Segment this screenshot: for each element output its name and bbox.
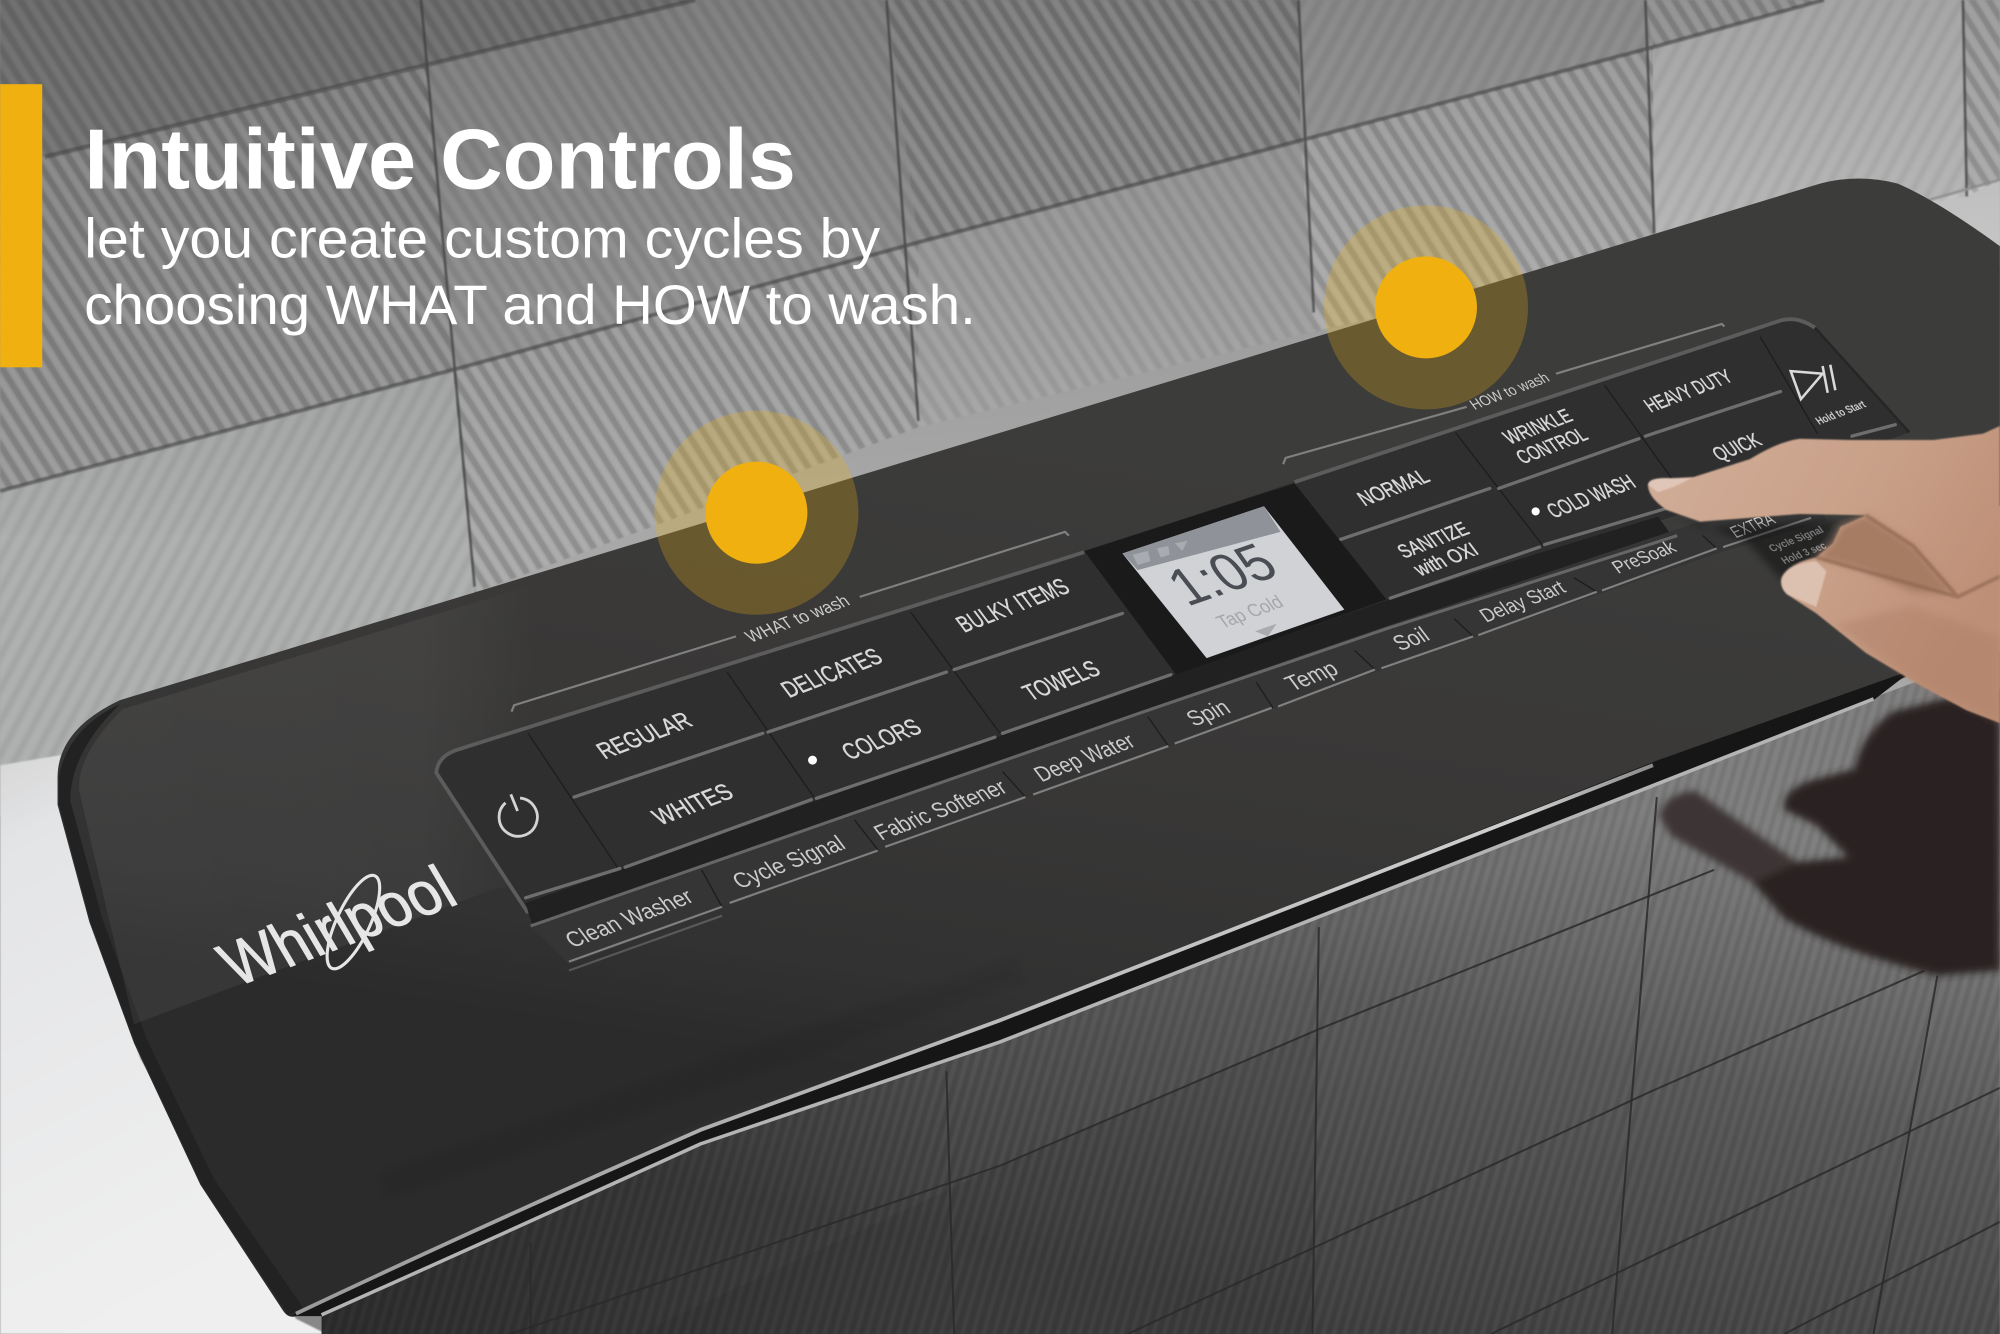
function strip labels: Cycle Signal	[1767, 525, 1826, 555]
function strip labels: Delay Start	[1475, 577, 1570, 627]
display time: 1:05	[1155, 533, 1290, 617]
cycle button labels	[592, 366, 1869, 830]
cycle button labels: QUICK	[1708, 430, 1766, 465]
function strip underlines	[569, 518, 1811, 971]
reflected tile grout	[510, 797, 2000, 1334]
display screen	[1122, 506, 1344, 658]
dark lower band	[526, 517, 1690, 928]
function strip labels: EXTRA	[1726, 510, 1780, 542]
label: WHAT to wash: WHAT to wash	[741, 591, 854, 646]
thumb shading	[1837, 606, 2000, 723]
display bezel	[1084, 483, 1386, 675]
subtitle: let you create custom cycles by	[84, 208, 880, 270]
panel outline	[436, 552, 1084, 913]
label: HOW to wash: HOW to wash	[1467, 370, 1553, 413]
function strip labels: Fabric Softener	[869, 775, 1012, 845]
glass lid with tile reflection	[306, 638, 2000, 1334]
cycle button labels: CONTROL	[1512, 424, 1592, 468]
function strip labels: Cycle Signal	[727, 831, 850, 893]
indicator light: colors	[808, 756, 817, 765]
horizontal sheen strokes	[663, 791, 1645, 1148]
chrome strips	[296, 765, 1653, 1314]
cycle button labels: WRINKLE	[1499, 405, 1577, 449]
function strip labels: Temp	[1280, 656, 1343, 696]
cycle button labels: SANITIZE	[1393, 518, 1474, 563]
display hint: Tap Cold	[1212, 592, 1288, 633]
cycle button labels: TOWELS	[1018, 657, 1106, 706]
hand	[1648, 426, 2000, 723]
callout marker: HOW to wash	[1324, 205, 1528, 409]
title: Intuitive Controls	[84, 113, 796, 208]
background: tiled wall	[0, 0, 2000, 816]
function strip labels: Soil	[1387, 622, 1434, 655]
icon: play pause	[1791, 365, 1835, 399]
hand reflection	[1659, 689, 2000, 976]
thumbnail	[1781, 561, 1826, 607]
function strip surface	[531, 485, 1826, 964]
hand creases	[1816, 515, 2000, 597]
cycle button labels: NORMAL	[1352, 464, 1434, 510]
function strip labels: Deep Water	[1029, 728, 1140, 786]
wall tile fills	[0, 0, 2000, 765]
cycle button labels: with OXI	[1409, 539, 1483, 581]
cycle button labels: COLD WASH	[1542, 470, 1640, 523]
control panel	[436, 319, 1909, 971]
bracket: WHAT to wash	[512, 532, 1069, 712]
wall grout lines	[0, 0, 2000, 587]
icon: power button	[493, 788, 542, 841]
black trim between chrome strips	[291, 670, 1913, 1316]
callout marker: WHAT to wash	[654, 411, 858, 615]
function strip labels: Clean Washer	[560, 884, 699, 952]
console rim	[59, 704, 304, 1315]
upper-left sheen	[79, 584, 536, 1024]
display status bar	[1122, 506, 1281, 570]
cycle button labels: Hold to Start	[1813, 398, 1869, 427]
white washer body	[0, 755, 327, 1334]
cycle button labels: DELICATES	[776, 644, 888, 703]
subtitle	[84, 208, 976, 336]
function strip labels	[560, 510, 1829, 952]
wall stripes	[0, 0, 2000, 765]
cycle button labels: HEAVY DUTY	[1640, 366, 1737, 417]
hand shadow	[1658, 508, 1837, 580]
cycle button labels: REGULAR	[592, 708, 698, 764]
function strip labels: Spin	[1181, 695, 1235, 731]
cycle button labels: COLORS	[837, 715, 927, 765]
panel surface	[436, 319, 1909, 913]
index fingernail	[1648, 478, 1691, 492]
indicator light: cold wash	[1532, 507, 1540, 515]
accent bar	[0, 84, 42, 367]
hand touching controls	[1648, 426, 2000, 723]
logo: Whirlpool: Whirlpool	[206, 853, 468, 999]
cycle button dividers and rules	[526, 337, 1895, 907]
bracket: HOW to wash	[1283, 324, 1724, 464]
cycle button labels: BULKY ITEMS	[951, 574, 1075, 638]
subtitle: choosing WHAT and HOW to wash.	[84, 274, 976, 336]
function strip labels: PreSoak	[1608, 537, 1681, 578]
cycle button labels: WHITES	[647, 780, 739, 830]
middle finger behind	[1816, 515, 1954, 594]
display	[1084, 483, 1386, 675]
function strip labels: Hold 3 sec	[1779, 540, 1829, 567]
